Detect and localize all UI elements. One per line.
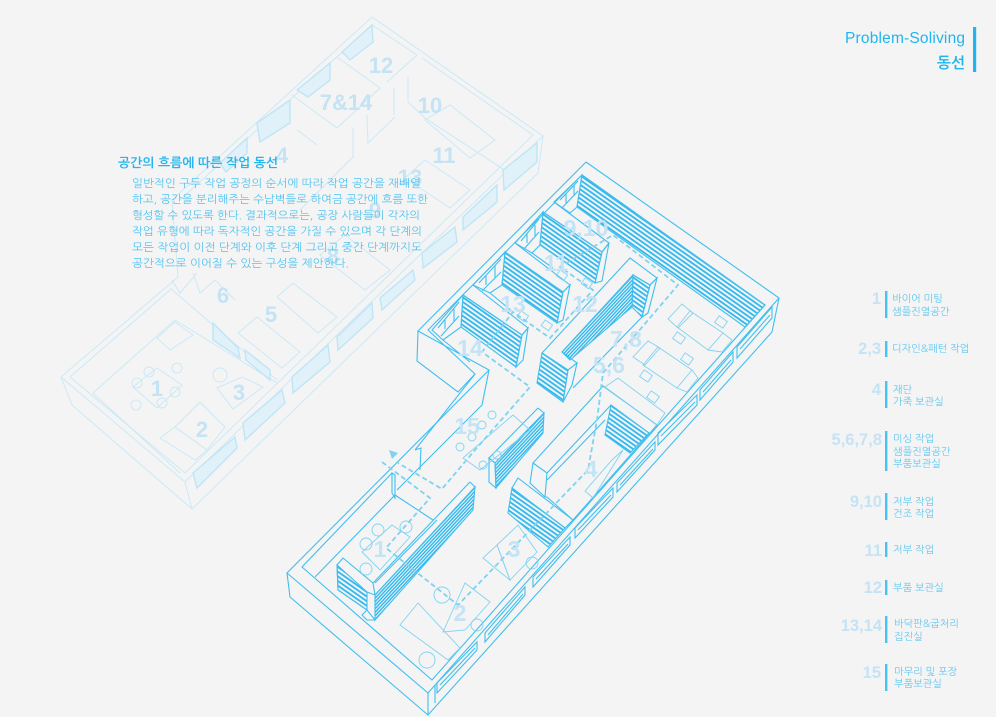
legend item 11: 저부 작업 <box>893 544 934 555</box>
ghost room numbers: 1 <box>151 376 163 401</box>
legend item 9,10: 9,10 <box>850 493 882 511</box>
main room numbers <box>374 215 642 626</box>
legend item 5,6,7,8 <box>832 431 951 471</box>
legend item 4: 4 <box>872 381 882 399</box>
page title: Problem-Soliving <box>845 30 965 47</box>
heading: flow of space: 공간의 흐름에 따른 작업 동선 <box>118 156 278 169</box>
main room numbers: 15 <box>454 413 480 439</box>
partition at room 15 <box>489 408 544 488</box>
legend item 13,14 <box>841 616 959 643</box>
description text block: 하고, 공간을 분리해주는 수납벽들로 하여금 공간에 흐름 또한 <box>132 193 429 205</box>
legend item 5,6,7,8: 부품보관실 <box>893 458 941 469</box>
legend item 13,14: 13,14 <box>841 617 883 635</box>
main room numbers: 12 <box>572 291 598 317</box>
ghost room numbers: 4 <box>276 143 289 168</box>
legend: work areas <box>832 290 969 691</box>
legend item 13,14: 바닥판&굽처리 <box>894 618 959 629</box>
main room numbers: 13 <box>500 291 526 317</box>
legend item 1: 바이어 미팅 <box>892 293 943 304</box>
legend item 12: 부품 보관실 <box>893 582 944 593</box>
description text block <box>132 177 429 269</box>
central U-shaped partition <box>537 258 657 402</box>
main room numbers: 4 <box>585 456 598 482</box>
legend item 2,3 <box>858 340 969 358</box>
legend item 9,10: 저부 작업 <box>893 496 934 507</box>
legend item 9,10: 건조 작업 <box>893 508 934 519</box>
description text block: 모든 작업이 이전 단계와 이후 단계 그리고 중간 단계까지도 <box>132 241 423 253</box>
main room numbers: 5,6 <box>593 352 625 378</box>
page title: 동선 <box>937 55 965 71</box>
ghost room numbers: 9 <box>369 198 381 223</box>
description text block: 작업 유형에 따라 독자적인 공간을 가질 수 있으며 각 단계의 <box>132 225 422 237</box>
page title <box>845 27 976 72</box>
legend item 1: 샘플진열공간 <box>892 306 950 317</box>
ghost room numbers: 8 <box>327 244 339 269</box>
ghost furniture <box>131 105 495 460</box>
storage wall 14 <box>432 285 528 367</box>
legend item 2,3: 디자인&패턴 작업 <box>892 343 969 354</box>
ghost room numbers: 6 <box>217 283 229 308</box>
legend item 15: 마무리 및 포장 <box>894 666 958 677</box>
legend item 12 <box>864 579 944 597</box>
dashed work flow paths <box>382 235 678 605</box>
main outer walls <box>287 162 779 715</box>
legend item 11 <box>865 542 934 560</box>
ghost room numbers: 12 <box>369 53 393 78</box>
storage wall 13 <box>473 243 570 323</box>
storage wall 9,10 <box>554 175 765 327</box>
right wall windows <box>437 307 772 693</box>
ghost room numbers: 10 <box>418 93 442 118</box>
main furniture <box>360 270 732 668</box>
description text block: 공간적으로 이어질 수 있는 구성을 제안한다. <box>132 257 349 269</box>
main room numbers: 1 <box>374 536 387 562</box>
ghost room numbers: 11 <box>432 143 456 168</box>
legend item 15: 15 <box>863 664 881 682</box>
legend item 5,6,7,8: 5,6,7,8 <box>832 431 882 449</box>
floor plan: faded overview <box>61 17 543 509</box>
legend item 9,10 <box>850 493 934 520</box>
ghost room numbers: 7&14 <box>320 90 373 115</box>
legend item 11: 11 <box>865 542 882 560</box>
legend item 13,14: 집진실 <box>894 631 923 642</box>
legend item 12: 12 <box>864 579 882 597</box>
legend item 4: 가죽 보관실 <box>893 396 944 407</box>
legend item 5,6,7,8: 샘플진열공간 <box>893 446 951 457</box>
ghost room numbers: 13 <box>398 165 422 190</box>
ghost room numbers: 3 <box>233 380 245 405</box>
description text block: 형성할 수 있도록 한다. 결과적으로는, 공장 사람들이 각자의 <box>132 209 420 221</box>
main room numbers: 11 <box>544 250 568 276</box>
icon: flow arrow <box>389 450 398 459</box>
legend item 15 <box>863 664 958 691</box>
legend item 5,6,7,8: 미싱 작업 <box>893 433 934 444</box>
room 4 partition <box>508 386 657 547</box>
ghost outer walls <box>61 17 543 509</box>
storage wall 11 <box>515 202 609 283</box>
description text block: 일반적인 구두 작업 공정의 순서에 따라 작업 공간을 재배열 <box>132 177 421 189</box>
main room numbers: 9,10 <box>564 215 608 241</box>
ghost room numbers: 2 <box>196 417 208 442</box>
floor plan: main isometric with work flow <box>287 162 779 715</box>
legend item 1: 1 <box>872 290 881 308</box>
ghost room numbers <box>151 53 456 442</box>
left room partitions <box>337 482 475 620</box>
ghost room numbers: 5 <box>265 302 277 327</box>
legend item 4 <box>872 381 944 408</box>
main room numbers: 14 <box>457 335 483 361</box>
main room numbers: 2 <box>454 600 466 626</box>
main room numbers: 7,8 <box>610 326 642 352</box>
legend item 4: 재단 <box>893 384 913 395</box>
legend item 1 <box>872 290 950 318</box>
legend item 15: 부품보관실 <box>894 678 942 689</box>
main room numbers: 3 <box>508 536 520 562</box>
legend item 2,3: 2,3 <box>858 340 881 358</box>
ghost windows <box>193 25 537 488</box>
